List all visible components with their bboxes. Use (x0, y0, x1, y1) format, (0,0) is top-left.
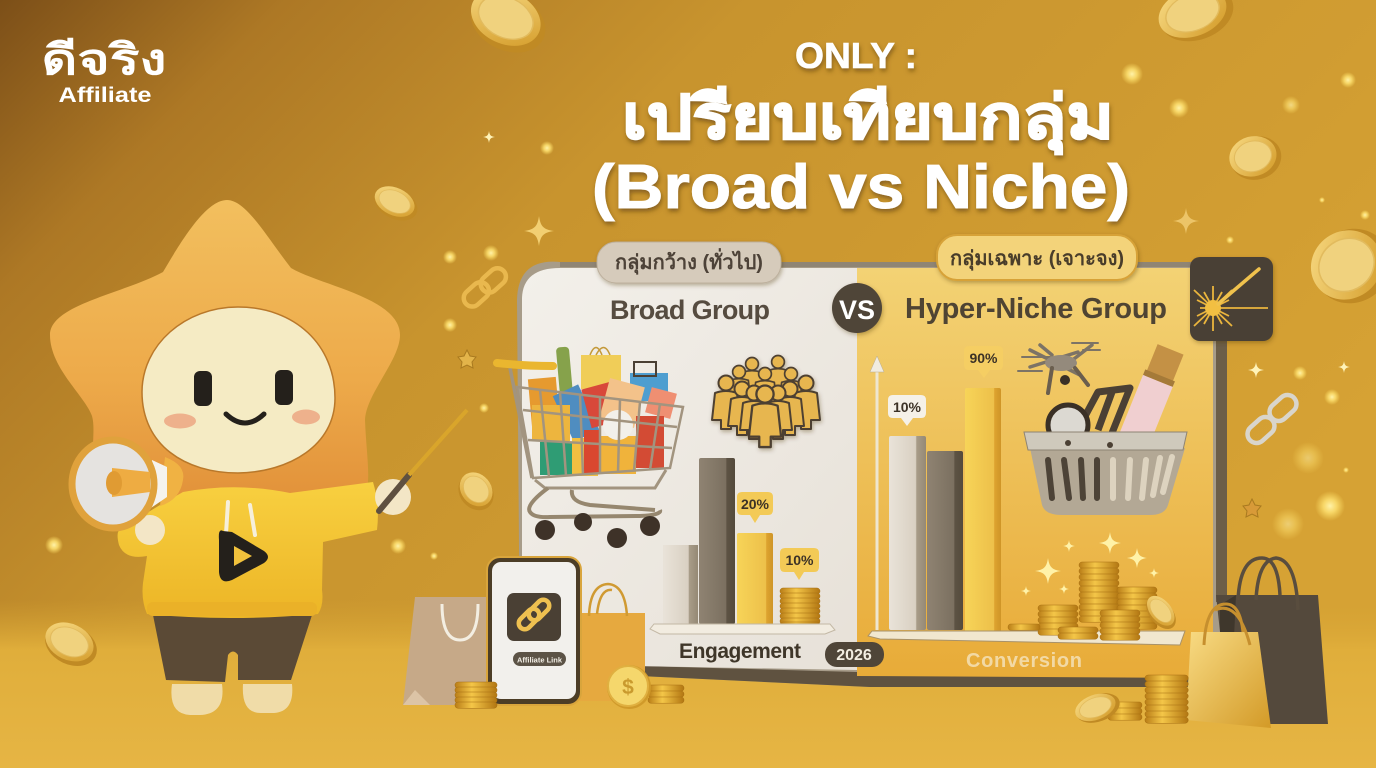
drone (1018, 343, 1100, 393)
cart wire (510, 368, 683, 517)
label 20%: 20% (741, 496, 770, 512)
coins near phone (455, 665, 684, 709)
mascot (50, 200, 467, 715)
basket handle (1076, 388, 1130, 433)
mascot pointer (375, 479, 411, 515)
mascot legs and shorts (153, 615, 312, 682)
orange shopping bag (571, 584, 645, 701)
title: (Broad vs Niche) (592, 153, 1130, 222)
mascot megaphone (135, 515, 165, 545)
phone with affiliate link (487, 557, 581, 705)
heading: hyper-niche group: Hyper-Niche Group (905, 293, 1167, 325)
title (592, 35, 1130, 222)
label 10%: 10% (893, 399, 922, 415)
vs badge: VS (839, 295, 875, 325)
title: ONLY : (795, 35, 917, 76)
cart wheels (535, 513, 660, 548)
vs badge (832, 283, 882, 333)
label 90% (964, 346, 1003, 378)
icon: chain link (516, 597, 552, 632)
coin stack bar (780, 588, 820, 628)
label: engagement: Engagement (679, 640, 801, 663)
basket body (1030, 448, 1185, 515)
pill: broad heading (597, 242, 781, 283)
logo: ดีจริง (42, 36, 166, 83)
decorative stars and chains (458, 208, 1300, 517)
broad bar chart (650, 458, 835, 634)
logo: Affiliate (58, 84, 152, 107)
affiliate link pill (513, 652, 566, 666)
mascot hoodie (118, 482, 378, 618)
label 10%: 10% (785, 552, 814, 568)
label 90%: 90% (969, 350, 998, 366)
axis arrow (870, 356, 884, 630)
label 20% (737, 492, 773, 523)
gold shopping bag (1186, 604, 1271, 728)
pill: broad heading: กลุ่มกว้าง (ทั่วไป) (615, 247, 763, 275)
product basket (1024, 343, 1187, 515)
heading: broad group: Broad Group (610, 295, 770, 325)
logo (42, 36, 166, 107)
mascot face (142, 307, 335, 473)
coin pile with sparkles (1008, 532, 1182, 640)
year badge: 2026 (836, 647, 872, 664)
year badge (825, 642, 884, 667)
people crowd icon (712, 355, 820, 447)
label 10% (780, 548, 819, 580)
title: เปรียบเทียบกลุ่ม (622, 84, 1114, 155)
dark shopping bag (1216, 558, 1328, 724)
tan shopping bag (403, 597, 497, 705)
coins near phone: $ (622, 676, 634, 699)
pill: niche heading (937, 235, 1137, 280)
bottle (1118, 343, 1185, 448)
laser icon (1190, 257, 1273, 341)
bokeh lights and sparkles (45, 63, 1370, 560)
mascot star head (50, 200, 400, 498)
cart goods (528, 377, 560, 429)
affiliate link pill: Affiliate Link (517, 656, 563, 664)
shopping cart (497, 346, 683, 548)
pill: niche heading: กลุ่มเฉพาะ (เจาะจง) (950, 248, 1124, 271)
coin stacks bottom right (1071, 675, 1188, 729)
label: conversion: Conversion (966, 650, 1082, 672)
main comparison panel (517, 262, 1227, 687)
label 10% (888, 395, 926, 426)
niche bar chart (868, 346, 1185, 645)
